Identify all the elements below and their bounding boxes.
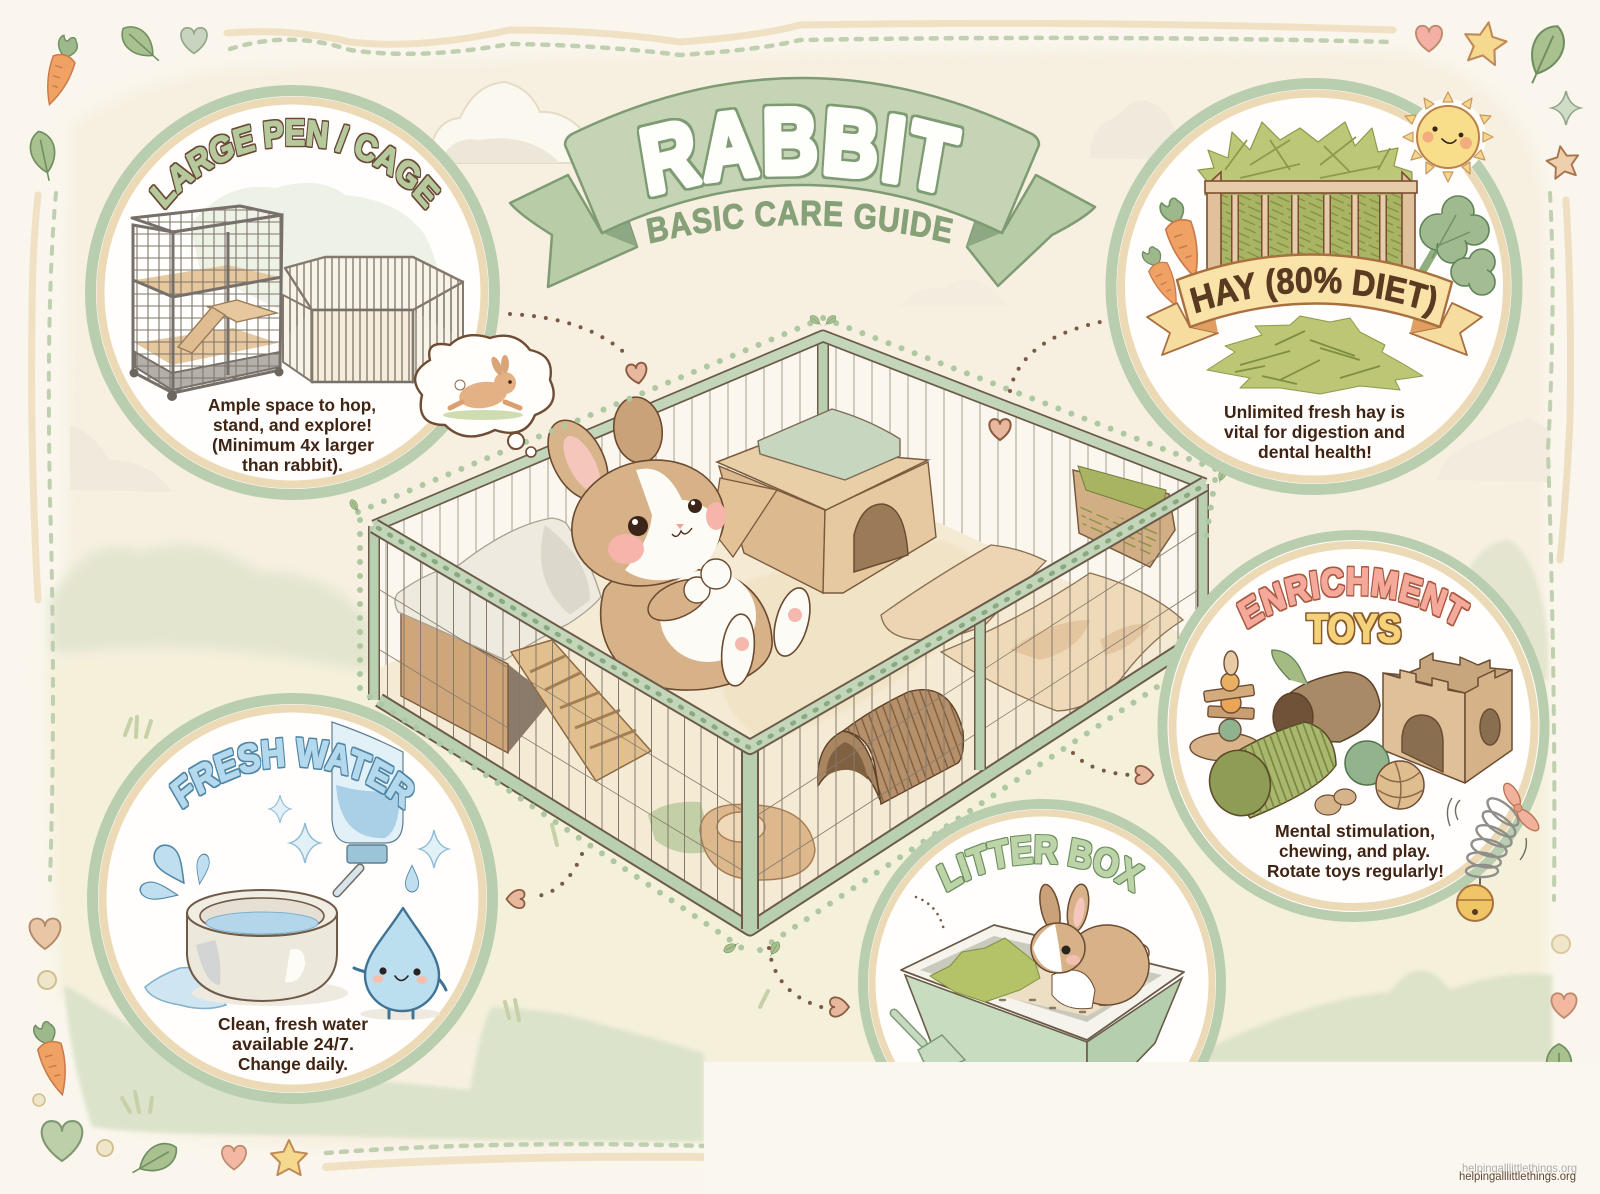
panel: litter box <box>858 799 1226 1062</box>
cloud: lower left <box>70 425 172 492</box>
watermark: helpingalllittlethings.org <box>1459 1169 1576 1183</box>
litter scoop <box>894 1013 965 1075</box>
description: available 24/7. <box>232 1034 354 1054</box>
cloud: top center <box>428 82 587 163</box>
ceramic bowl <box>700 804 815 880</box>
description <box>208 395 376 475</box>
heading: FRESH WATER <box>168 736 415 811</box>
rabbit feet <box>718 584 817 687</box>
description: vital for digestion and <box>1224 422 1405 442</box>
panel ring <box>1162 535 1544 917</box>
title text: RABBIT <box>636 104 964 200</box>
towel <box>758 409 900 480</box>
icon: top right spinach leaf <box>1519 20 1571 89</box>
icon: right heart <box>1551 993 1577 1018</box>
watermark shadow: helpingalllittlethings.org <box>1462 1161 1577 1175</box>
blank cover box <box>704 1062 1600 1194</box>
description: than rabbit). <box>242 455 343 475</box>
heading: ENRICHMENT <box>1236 566 1471 630</box>
hay rack on wall <box>1073 466 1175 567</box>
icon: top right heart <box>1416 26 1442 52</box>
title banner <box>508 76 1096 288</box>
hay pile <box>1207 316 1423 394</box>
pen back rails <box>374 336 1205 526</box>
tall wire cage <box>130 206 284 401</box>
wooden house <box>712 409 936 593</box>
pen front rails <box>374 484 1205 929</box>
panel: fresh water <box>87 693 498 1104</box>
hay crate <box>1198 122 1417 270</box>
panel: enrichment toys <box>1158 530 1550 922</box>
icon: top right star <box>1461 19 1509 66</box>
rabbit eyes and cheeks <box>608 499 726 564</box>
stacking toy <box>1190 651 1260 761</box>
icon: left leaf <box>27 129 61 183</box>
heading second line: TOYS <box>1307 607 1401 651</box>
icon: bottom circle <box>97 1140 113 1156</box>
icon: right circle one <box>1552 935 1570 953</box>
small ramp <box>712 478 777 557</box>
icon: bottom star <box>271 1140 307 1175</box>
description: Ample space to hop, <box>208 395 376 415</box>
tunnel <box>818 690 963 804</box>
icon: lower left carrot <box>31 1019 74 1098</box>
rabbit body <box>601 566 772 690</box>
description: Change daily. <box>238 1054 348 1074</box>
panel ring <box>92 698 492 1098</box>
description: (Minimum 4x larger <box>212 435 374 455</box>
arrow: to litter <box>769 948 849 1017</box>
green hay clump <box>648 802 715 853</box>
icon: lower left heart <box>30 919 60 949</box>
arrow: top right <box>1010 322 1100 391</box>
left hidey box <box>395 518 601 753</box>
heading: LITTER BOX <box>936 834 1146 894</box>
panel: hay <box>1106 78 1522 495</box>
icon: sparkle <box>1551 91 1581 125</box>
small heart on wall <box>989 419 1011 440</box>
subtitle text: BASIC CARE GUIDE <box>646 200 954 244</box>
water bottle <box>332 722 403 893</box>
banner tail right <box>967 175 1095 286</box>
icon: small circle <box>33 1094 45 1106</box>
description: Rotate toys regularly! <box>1267 861 1444 881</box>
pen dotted outline <box>358 318 1218 950</box>
cloud: left of hay <box>1090 100 1182 160</box>
sand patch <box>715 540 981 740</box>
icon: green heart <box>42 1121 82 1161</box>
litter rabbit <box>1031 883 1149 1009</box>
icon: left circle <box>38 971 56 989</box>
wooden ramp <box>511 640 651 781</box>
pen front walls <box>374 484 1205 929</box>
arrow: to water <box>506 854 582 908</box>
rabbit face markings <box>625 469 722 580</box>
hollow log <box>1272 650 1380 742</box>
green yarn ball <box>1345 741 1389 785</box>
small carrot <box>1140 244 1185 310</box>
soft cloud backdrop <box>190 183 441 320</box>
laurel sprigs <box>348 314 1227 958</box>
hexagonal playpen <box>283 257 463 382</box>
rabbit belly <box>660 570 756 662</box>
description <box>218 1014 368 1074</box>
bowl shadow <box>192 980 348 1006</box>
sun <box>1403 92 1493 182</box>
description <box>1224 402 1405 462</box>
icon: top left heart <box>181 28 207 54</box>
heading: LARGE PEN / CAGE <box>148 118 442 211</box>
rabbit arms <box>642 559 731 629</box>
puddle <box>145 968 226 1008</box>
icon: small star <box>1544 143 1581 180</box>
banner tail left <box>510 175 637 287</box>
lettuce small <box>1451 249 1495 295</box>
splash drops <box>139 840 419 903</box>
wood pellets <box>1315 789 1356 815</box>
central pen illustration <box>348 314 1227 958</box>
dotted arrows with hearts <box>506 314 1154 1017</box>
banner text: HAY (80% DIET) <box>1190 266 1436 319</box>
spring toy with bell <box>1447 781 1542 921</box>
arrow: top left <box>510 314 649 385</box>
water bowl <box>187 890 337 1001</box>
rabbit near ear <box>536 410 620 510</box>
lower fleece pad <box>941 573 1183 711</box>
description: dental health! <box>1258 442 1372 462</box>
grass tufts <box>122 717 768 1112</box>
description: Clean, fresh water <box>218 1014 368 1034</box>
main rabbit <box>536 394 817 690</box>
cardboard castle <box>1383 653 1512 783</box>
big carrot <box>1157 195 1208 282</box>
hay banner <box>1146 253 1483 356</box>
icon: bottom pink heart <box>222 1146 246 1170</box>
panel ring <box>90 90 494 494</box>
rabbit far ear <box>610 394 666 466</box>
banner band <box>565 78 1039 233</box>
pen back walls <box>374 336 1205 668</box>
icon: right leaf <box>1547 1044 1571 1097</box>
hay in tray <box>930 938 1040 1002</box>
tan yarn ball <box>1376 761 1424 809</box>
sparkles <box>269 795 449 868</box>
description: chewing, and play. <box>1279 841 1430 861</box>
lettuce big <box>1420 196 1489 272</box>
droplet mascot <box>354 908 446 1020</box>
description <box>1267 821 1444 881</box>
panel ring <box>1111 84 1517 490</box>
small dotted arrow <box>916 897 944 930</box>
icon: top left carrot <box>39 33 82 108</box>
panel ring <box>863 804 1221 1162</box>
green tunnel <box>1201 722 1336 824</box>
rabbit head <box>558 444 738 602</box>
description: Mental stimulation, <box>1275 821 1435 841</box>
icon: thought bubble with running rabbit <box>415 335 554 457</box>
icon: top left leaf <box>116 20 166 69</box>
upper fleece mat <box>881 545 1046 640</box>
description: Unlimited fresh hay is <box>1224 402 1405 422</box>
cloud: above pen <box>900 279 1006 306</box>
icon: bottom leaf <box>127 1137 182 1183</box>
description: stand, and explore! <box>213 415 372 435</box>
arrow: to toys <box>1073 753 1154 784</box>
panel: large pen / cage <box>85 85 500 500</box>
litter tray <box>901 925 1184 1090</box>
cloud: right of hay <box>1437 418 1550 482</box>
pen floor <box>379 470 1196 929</box>
